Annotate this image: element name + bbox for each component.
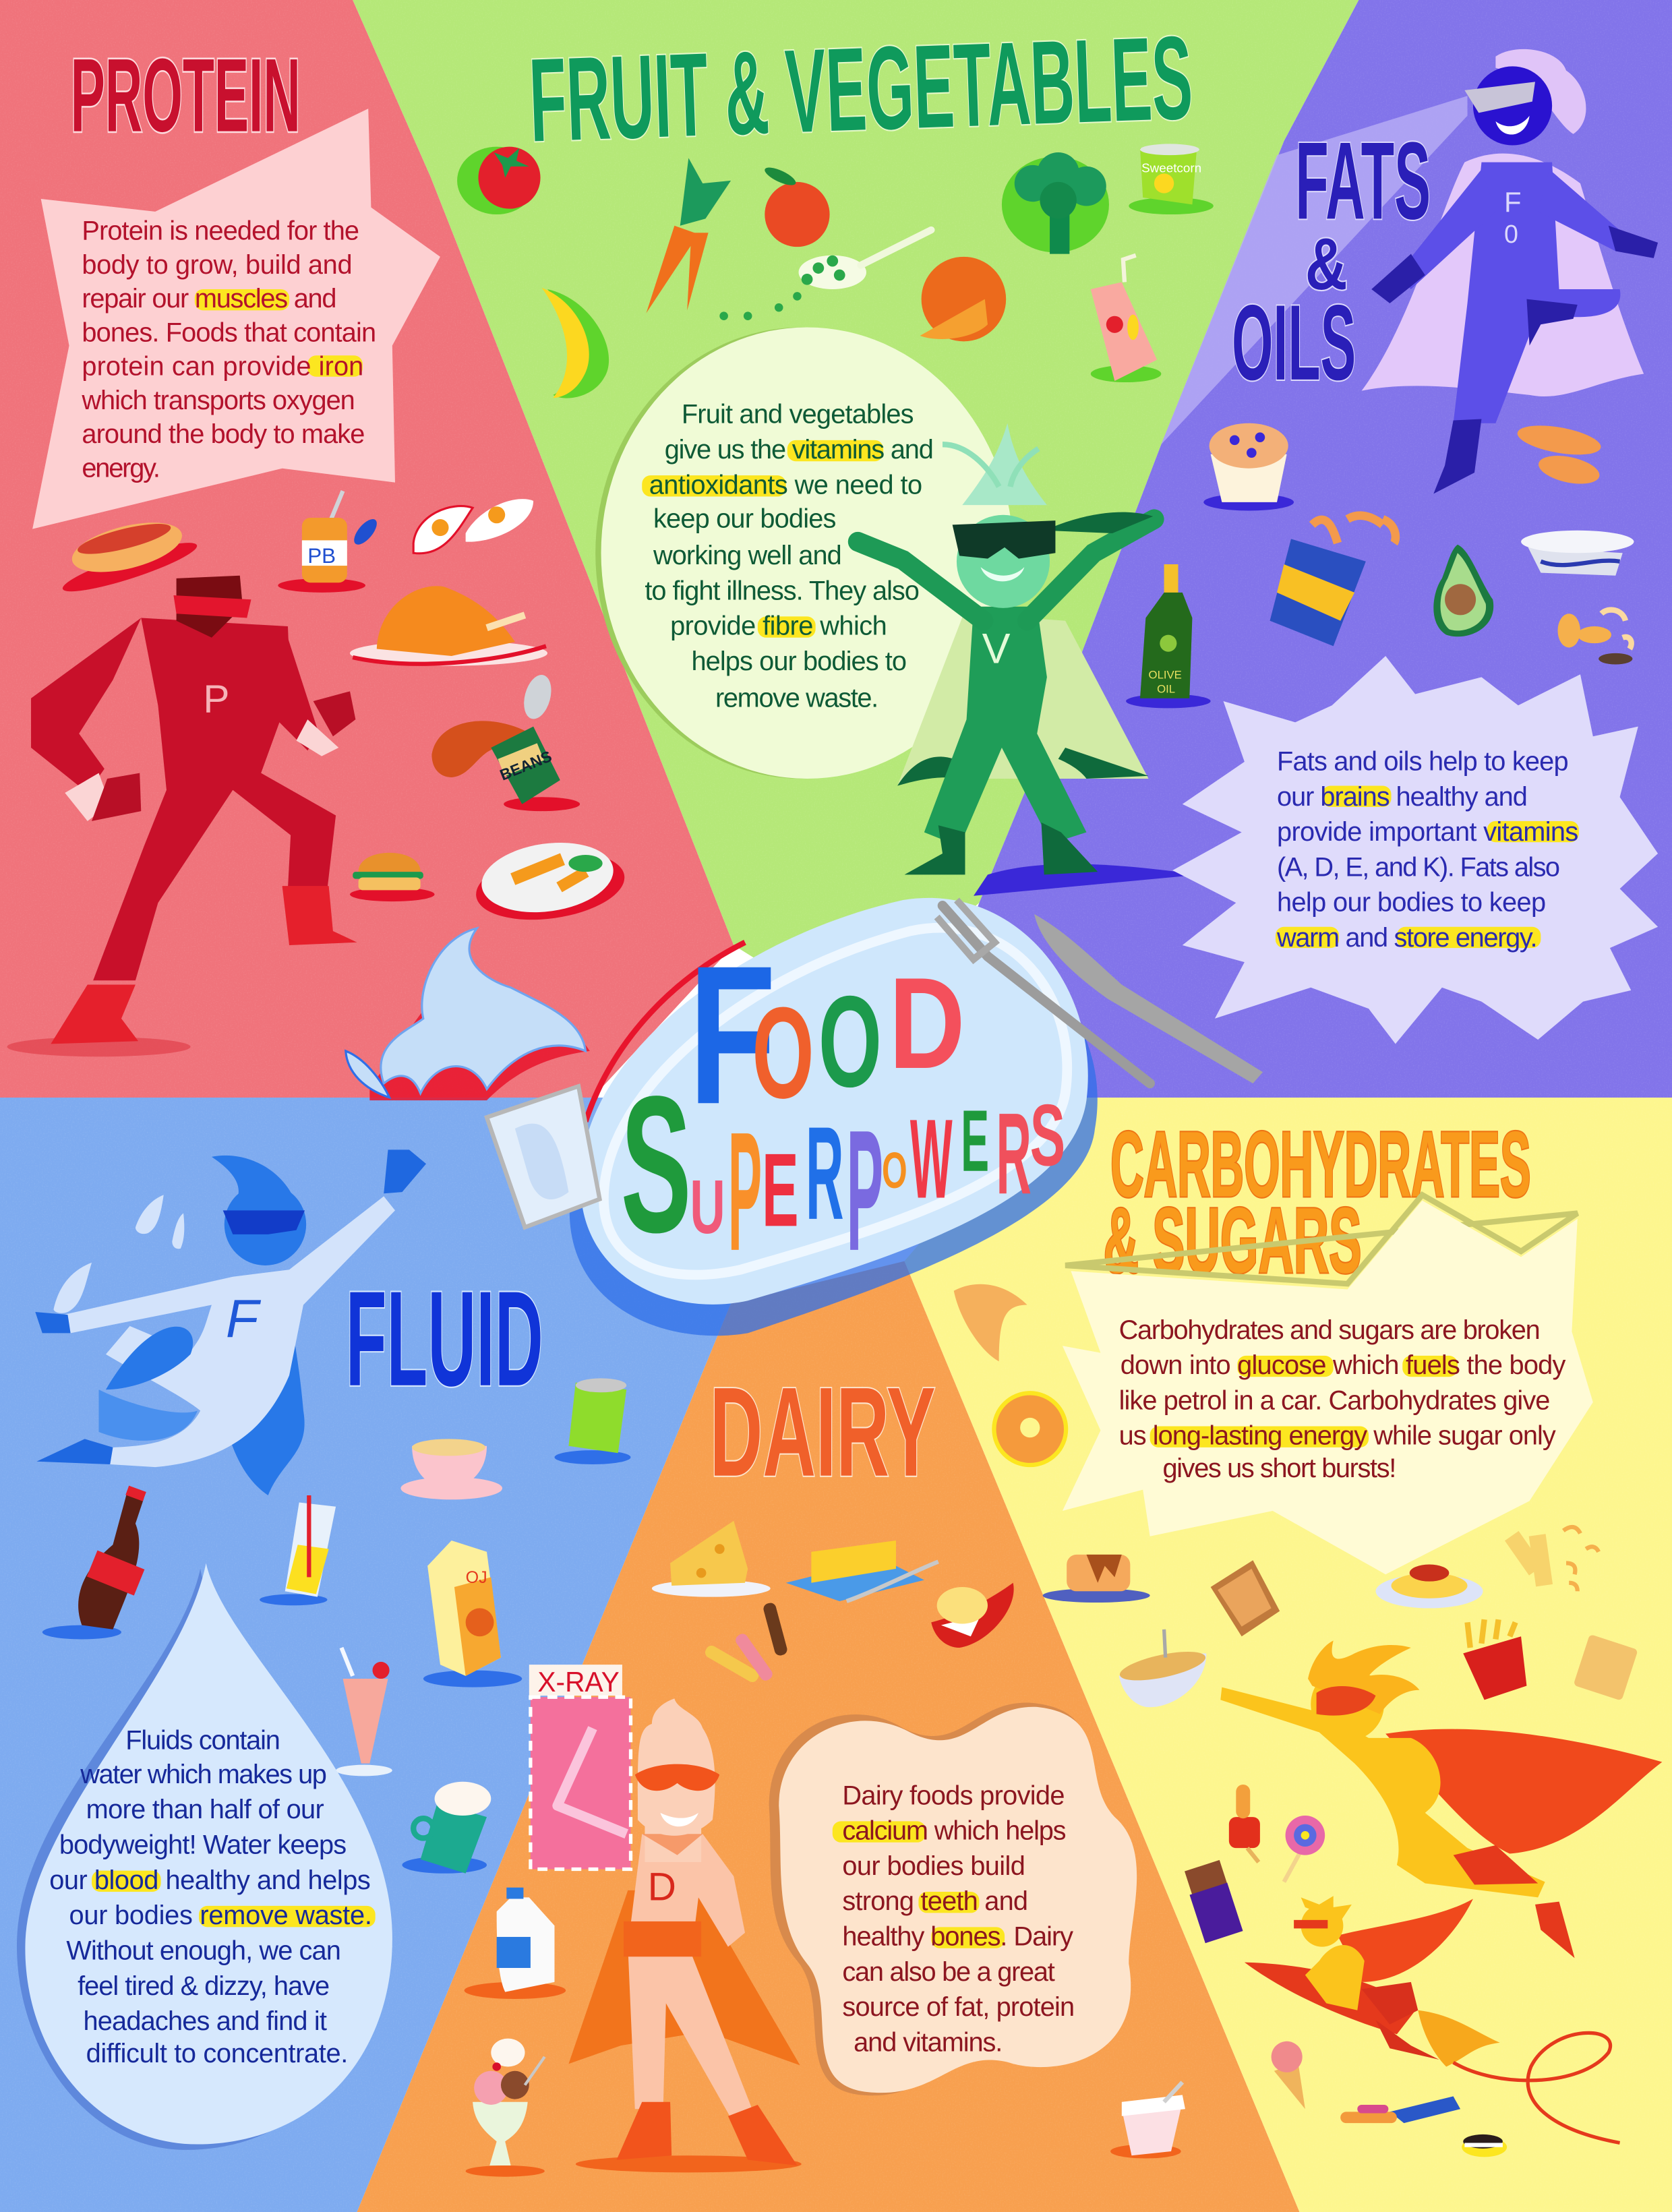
icon: ice cream sundae <box>466 2039 545 2177</box>
highlight: glucose <box>1237 1356 1334 1377</box>
icon: chocolate bar <box>1185 1860 1243 1943</box>
text block: carbohydrates: us long-lasting energy while sugar only <box>1119 1421 1556 1451</box>
icon: peanut butter jar: PB <box>307 544 336 568</box>
text: FLUID <box>346 1263 543 1414</box>
text block: fruit and vegetables: keep our bodies <box>653 504 837 534</box>
text block: fats and oils: provide important vitamins <box>1277 817 1579 847</box>
title: Superpowers: E <box>961 1093 989 1190</box>
icon: sandwich biscuit <box>1462 2134 1507 2157</box>
text block: fruit and vegetables: give us the vitamins and <box>665 435 934 465</box>
icon: fried eggs <box>413 499 533 554</box>
icon: olive oil bottle: OLIVE <box>1149 668 1182 681</box>
icon: dentures <box>931 1583 1014 1648</box>
text block: dairy <box>842 1781 1075 2057</box>
section background: dairy <box>357 1261 1299 2212</box>
panel: fluid text bubble <box>17 1563 392 2150</box>
highlight: vitamins <box>1487 821 1579 842</box>
icon: orange <box>920 257 1006 341</box>
icon: baked beans: BEANS <box>498 747 554 784</box>
text block: fluid: Fluids contain <box>125 1726 280 1756</box>
icon: sweetcorn can: Sweetcorn <box>1141 160 1201 175</box>
highlight: antioxidants <box>642 475 786 497</box>
icon: carrots <box>647 158 731 313</box>
text block: fats and oils: warm and store energy. <box>1276 923 1538 953</box>
text block: dairy: and vitamins. <box>854 2027 1003 2057</box>
icon: lemonade glass <box>260 1495 336 1605</box>
text block: dairy: our bodies build <box>842 1851 1025 1881</box>
knife <box>1034 914 1263 1083</box>
text block: carbohydrates: Carbohydrates and sugars are broken <box>1119 1315 1541 1345</box>
icon: smoothie glass <box>336 1648 392 1776</box>
icon: lollipop <box>1284 1816 1325 1882</box>
icon: baked beans <box>431 671 580 811</box>
text block: fruit and vegetables: provide fibre which <box>670 611 887 641</box>
title: Food: F <box>688 925 776 1145</box>
icon: fish fingers plate <box>472 835 629 928</box>
section background: fluid <box>0 1098 731 2212</box>
panel: protein text bubble <box>32 109 440 529</box>
panel: carbohydrates text bubble <box>1063 1195 1593 1574</box>
text block: protein: Protein is needed for the <box>82 216 360 246</box>
highlight: fibre <box>758 616 816 638</box>
title: Superpowers <box>621 1056 1065 1287</box>
text block: carbohydrates: gives us short bursts! <box>1162 1454 1397 1483</box>
icon: muffin <box>1203 423 1294 510</box>
icon: juice box <box>1091 256 1161 382</box>
highlight: bones <box>931 1927 1005 1948</box>
heading line: and Sugars: & SUGARS <box>1104 1189 1362 1292</box>
panel: fats and oils text bubble <box>1172 656 1658 1044</box>
icon: pancakes <box>1043 1555 1150 1603</box>
text block: fluid: difficult to concentrate. <box>86 2039 349 2068</box>
fork <box>937 900 1150 1083</box>
title: Superpowers: W <box>910 1096 953 1222</box>
highlight: vitamins <box>787 440 883 461</box>
icon: toast <box>1211 1560 1280 1636</box>
icon: olive oil bottle: OIL <box>1157 682 1175 695</box>
central plate <box>570 898 1098 1336</box>
hero: carbohydrates flying <box>1220 1641 1662 1958</box>
icon: fries <box>1463 1619 1526 1700</box>
icon: sweets packet <box>1340 2096 1460 2123</box>
text: PROTEIN <box>71 37 301 154</box>
highlight: warm <box>1276 927 1339 948</box>
text block: fluid: headaches and find it <box>83 2006 328 2036</box>
title: Food: O <box>752 980 814 1125</box>
icon: spaghetti <box>1376 1565 1483 1608</box>
title: Superpowers: U <box>690 1164 725 1249</box>
title: Superpowers: S <box>1030 1087 1065 1184</box>
text block: fluid: our bodies remove waste. <box>69 1901 373 1930</box>
text block: fruit and vegetables: remove waste. <box>715 683 879 713</box>
text block: dairy: healthy bones. Dairy <box>842 1922 1074 1952</box>
X-ray panel <box>529 1665 630 1870</box>
icon: broccoli <box>1002 152 1109 254</box>
icon: cookies <box>1515 420 1603 489</box>
text block: dairy: calcium which helps <box>842 1816 1067 1846</box>
shadow under vegetable hero <box>974 864 1199 896</box>
text block: fruit and vegetables: to fight illness. They also <box>645 576 920 605</box>
text block: dairy: strong teeth and <box>842 1886 1029 1916</box>
title: Food: O <box>818 969 882 1114</box>
text block: protein: around the body to make <box>82 419 365 449</box>
text block: fats and oils <box>1276 746 1579 953</box>
hero: protein: P <box>203 678 229 721</box>
X-ray label: X-RAY <box>537 1666 620 1698</box>
title: Food <box>688 925 965 1145</box>
section background: protein <box>0 0 734 1098</box>
title: Superpowers: R <box>806 1099 844 1247</box>
highlight: calcium <box>833 1821 926 1843</box>
text block: dairy: source of fat, protein <box>842 1992 1075 2022</box>
title: Superpowers: P <box>728 1098 762 1286</box>
icon: cheese <box>652 1521 771 1597</box>
icon: apple <box>763 164 830 247</box>
icon: nuts <box>1557 610 1632 665</box>
hero: fats and oils: F <box>1504 186 1522 218</box>
text block: protein: which transports oxygen <box>81 386 355 415</box>
icon: ice cream cone <box>1272 2041 1305 2109</box>
hero: fats and oils: 0 <box>1504 220 1518 248</box>
text block: protein: protein can provide iron <box>82 352 364 382</box>
title: Food: D <box>889 951 965 1096</box>
icon: ice pops <box>703 1602 788 1684</box>
icon: tea cup <box>400 1439 502 1499</box>
icon: hot chocolate mug <box>402 1782 491 1874</box>
text block: carbohydrates <box>1119 1315 1566 1483</box>
section background: fats and oils <box>903 0 1672 1098</box>
hero: vegetable <box>858 423 1154 874</box>
highlight: brains <box>1322 786 1392 807</box>
hero: fats and oils <box>1362 49 1658 494</box>
title: Superpowers: P <box>847 1095 883 1287</box>
water splash <box>346 928 590 1100</box>
icon: burger <box>350 853 435 901</box>
text block: fluid <box>49 1726 373 2068</box>
icon: orange juice carton: OJ <box>466 1568 487 1587</box>
text block: protein: body to grow, build and <box>82 250 353 280</box>
panel: dairy text bubble <box>769 1702 1137 2095</box>
icon: hot dog <box>59 513 200 599</box>
icon: milk bottle <box>465 1888 566 1999</box>
text block: protein: energy. <box>82 453 161 483</box>
title: Superpowers: E <box>762 1131 799 1248</box>
text block: carbohydrates: like petrol in a car. Carbohydrates give <box>1119 1385 1551 1415</box>
heading: Carbohydrates and Sugars <box>1104 1112 1531 1292</box>
icon: olive oil bottle <box>1126 564 1211 708</box>
hero: dairy <box>568 1698 802 2172</box>
title: Superpowers: O <box>882 1142 907 1199</box>
heading: Fats and Oils: OILS <box>1232 282 1356 402</box>
text block: fluid: more than half of our <box>86 1795 324 1824</box>
heading line: ampersand: & <box>1305 223 1348 305</box>
lasso line <box>1454 2033 1620 2143</box>
icon: margarine tub <box>1521 531 1634 576</box>
icon: crisp packet <box>1270 516 1396 646</box>
text block: fluid: bodyweight! Water keeps <box>59 1830 347 1860</box>
text block: protein <box>81 216 377 483</box>
light beam from visor <box>1161 96 1468 444</box>
icon: croissant <box>954 1284 1027 1361</box>
text block: protein: repair our muscles and <box>82 284 337 313</box>
section background: carbohydrates and sugars <box>905 1098 1672 2212</box>
hero: rocket rider <box>1245 1896 1500 2066</box>
text block: fluid: feel tired & dizzy, have <box>78 1971 330 2001</box>
text block: dairy: Dairy foods provide <box>842 1781 1065 1810</box>
icon: roast chicken <box>350 586 547 666</box>
hero: protein <box>7 576 357 1056</box>
highlight: teeth <box>918 1892 979 1913</box>
title: Superpowers: S <box>621 1056 691 1274</box>
icon: ice lolly <box>1229 1785 1260 1862</box>
text block: fluid: Without enough, we can <box>66 1936 341 1965</box>
hero: vegetable: V <box>982 625 1011 672</box>
icon: cracker <box>1574 1634 1638 1701</box>
icon: sweetcorn can <box>1129 144 1214 214</box>
icon: peas on spoon <box>719 230 931 320</box>
icon: doughnut <box>992 1391 1068 1467</box>
icon: cola bottle <box>42 1486 146 1639</box>
hero: fluid: F <box>226 1289 262 1349</box>
icon: banana <box>542 288 609 398</box>
icon: cereal bowl <box>1118 1630 1207 1707</box>
icon: yogurt pot <box>1110 2082 1185 2158</box>
glass of water <box>487 1086 599 1227</box>
icon: orange juice carton <box>423 1541 522 1687</box>
title: Superpowers: R <box>996 1089 1032 1218</box>
text block: protein: bones. Foods that contain <box>82 318 377 347</box>
text block: fruit and vegetables: working well and <box>653 541 842 570</box>
text block: fluid: water which makes up <box>80 1760 328 1789</box>
icon: soda can <box>554 1378 630 1464</box>
text block: fats and oils: our brains healthy and <box>1277 782 1528 812</box>
highlight: blood <box>92 1871 161 1892</box>
highlight: fuels <box>1402 1356 1458 1377</box>
icon: dry pasta <box>1505 1527 1599 1591</box>
icon: butter dish <box>786 1541 938 1601</box>
highlight: remove waste <box>199 1906 376 1927</box>
X-ray card with arm bone <box>531 1697 630 1870</box>
hero: dairy: D <box>648 1865 676 1909</box>
heading: Fats and Oils <box>1232 119 1431 402</box>
icon: avocado <box>1433 545 1493 636</box>
text block: fats and oils: (A, D, E, and K). Fats also <box>1277 852 1561 882</box>
panel: fruit and vegetables text bubble <box>595 327 1013 779</box>
highlight: long-lasting energy <box>1150 1426 1369 1447</box>
heading: Dairy: DAIRY <box>710 1361 936 1503</box>
highlight: muscles <box>195 289 289 310</box>
main title: Food Superpowers <box>621 925 1065 1287</box>
text block: fats and oils: Fats and oils help to keep <box>1277 746 1569 776</box>
text block: dairy: can also be a great <box>842 1957 1055 1987</box>
highlight: store energy <box>1397 927 1541 948</box>
text block: carbohydrates: down into glucose which fuels the body <box>1121 1350 1566 1380</box>
text block: fruit and vegetables <box>645 400 934 713</box>
text: FATS <box>1295 119 1431 242</box>
icon: peanut butter jar <box>278 491 381 593</box>
section background: fruit and vegetables <box>353 0 1358 1016</box>
hero: fluid <box>35 1149 426 1495</box>
text block: fruit and vegetables: helps our bodies to <box>691 647 907 676</box>
text block: fruit and vegetables: Fruit and vegetables <box>682 400 914 429</box>
highlight: iron <box>307 355 363 377</box>
text block: fruit and vegetables: antioxidants we need to <box>649 470 923 500</box>
icon: tomato <box>457 147 541 214</box>
text block: fats and oils: help our bodies to keep <box>1277 888 1547 918</box>
text block: fluid: our blood healthy and helps <box>49 1865 371 1895</box>
